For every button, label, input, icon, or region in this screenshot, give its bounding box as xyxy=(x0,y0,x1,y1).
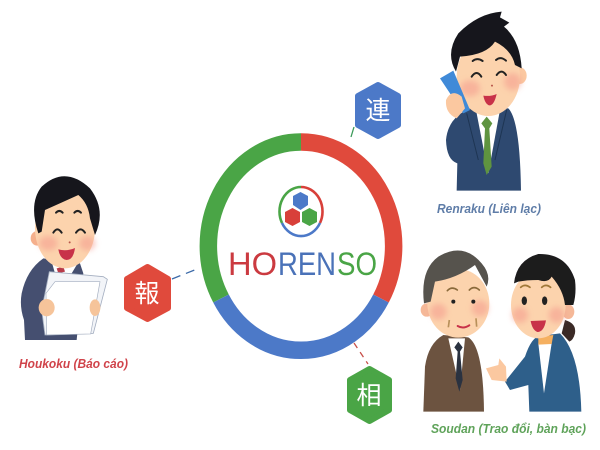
logo icon xyxy=(279,187,323,236)
connector: hou xyxy=(172,269,197,279)
hexagon: 報 xyxy=(127,267,168,319)
label: Soudan: Soudan (Trao đổi, bàn bạc) xyxy=(431,421,586,436)
logo wordmark HORENSO xyxy=(228,246,377,282)
connector: sou xyxy=(354,343,368,364)
connector: ren xyxy=(351,127,354,137)
hexagon: 相 xyxy=(350,369,389,421)
label: Houkoku: Houkoku (Báo cáo) xyxy=(19,356,128,371)
logo wordmark HORENSO: SO xyxy=(337,246,377,282)
hexagon: 連 xyxy=(358,85,398,136)
characters: Soudan colleagues xyxy=(421,251,581,412)
character: Renraku man with phone xyxy=(440,12,527,191)
logo wordmark HORENSO: HO xyxy=(228,246,277,282)
hexagon: 報: 報 xyxy=(134,280,160,308)
label: Renraku: Renraku (Liên lạc) xyxy=(437,201,541,216)
hexagon: 相: 相 xyxy=(356,382,382,410)
hexagon: 連: 連 xyxy=(365,97,391,125)
character: Houkoku man with papers xyxy=(21,176,107,340)
logo wordmark HORENSO: REN xyxy=(278,246,336,282)
central ring xyxy=(208,142,394,350)
